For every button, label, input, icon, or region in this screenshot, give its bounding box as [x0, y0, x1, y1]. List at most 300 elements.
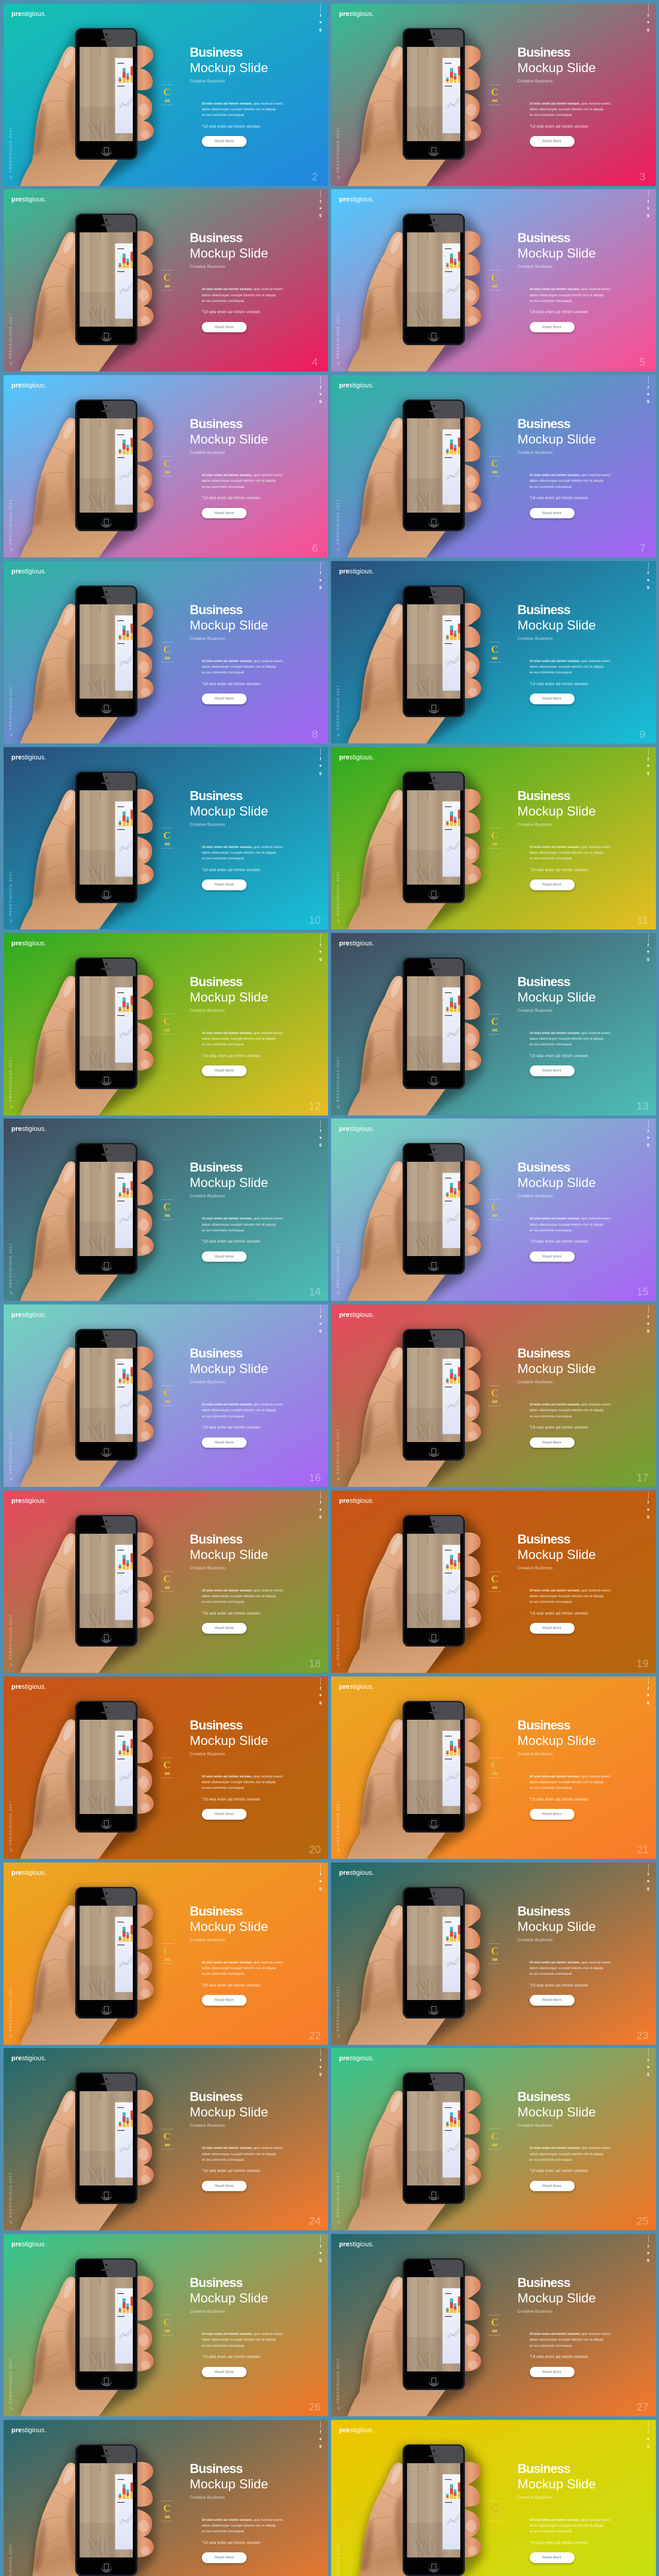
- body text: tation ullamcorper suscipit lobortis nisl ut aliquip: [529, 1595, 603, 1598]
- body text: [202, 1216, 283, 1233]
- body text: Ut wisi enim ad minim veniam, quis nostrud exerci: [202, 1961, 283, 1964]
- page number: 10: [309, 914, 321, 926]
- body text: Ut wisi enim ad minim veniam, quis nostrud exerci: [529, 659, 611, 663]
- button: [529, 1251, 575, 1262]
- body text: Ut wisi enim ad minim veniam, quis nostrud exerci: [202, 1775, 283, 1778]
- logo: prestigious.: [11, 9, 46, 18]
- social icons: ♥: [319, 1136, 322, 1140]
- button: Read More: [215, 1625, 234, 1630]
- body text: ex ea commodo consequat.: [202, 299, 245, 303]
- subtitle: Creative Business: [189, 1193, 225, 1198]
- page number: 11: [637, 914, 648, 926]
- title: [517, 1160, 596, 1191]
- social icons: ♥: [647, 2251, 649, 2256]
- social icons: g: [647, 27, 649, 32]
- subtitle: Creative Business: [189, 1379, 225, 1384]
- body text: tation ullamcorper suscipit lobortis nisl ut aliquip: [202, 294, 276, 297]
- social icons: f: [648, 199, 649, 204]
- title: [517, 230, 596, 261]
- button: Read More: [215, 139, 234, 143]
- button: [529, 879, 575, 890]
- title: Mockup Slide: [189, 1548, 268, 1562]
- button: [202, 2552, 247, 2563]
- panel: slide 18: [3, 1490, 328, 1673]
- social icons: f: [648, 13, 649, 18]
- page number: 13: [636, 1100, 649, 1112]
- social icons: f: [320, 943, 321, 947]
- watermark: [489, 1199, 501, 1220]
- hand holding phone: [345, 24, 488, 186]
- watermark: C: [163, 1387, 171, 1399]
- title: [517, 1718, 596, 1749]
- social icons: g: [647, 771, 649, 775]
- quote: "Ut wisi enim ad minim veniam: [529, 1239, 588, 1244]
- body text: ex ea commodo consequat.: [529, 1229, 573, 1232]
- watermark: C: [491, 87, 498, 98]
- social icons: ♥: [647, 950, 649, 954]
- watermark: C: [163, 644, 171, 655]
- title: Business: [189, 417, 242, 431]
- quote: "Ut wisi enim ad minim veniam: [529, 2540, 588, 2545]
- logo: prestigious.: [339, 939, 374, 947]
- title: [189, 1718, 268, 1749]
- logo: prestigious.: [339, 1497, 374, 1504]
- title: [189, 230, 268, 261]
- body text: [529, 1216, 611, 1233]
- page number: 15: [636, 1286, 649, 1298]
- title: Mockup Slide: [189, 618, 268, 633]
- panel: slide 6: [3, 375, 328, 557]
- body text: Ut wisi enim ad minim veniam, quis nostrud exerci: [529, 1775, 611, 1778]
- body text: [529, 1774, 611, 1791]
- social icons: [646, 562, 651, 590]
- hand holding phone: [331, 1118, 656, 1301]
- title: [517, 1346, 596, 1377]
- hand holding phone: [3, 2048, 328, 2230]
- social icons: [318, 190, 323, 219]
- watermark: C: [491, 1759, 498, 1771]
- watermark: [489, 1757, 501, 1778]
- vertical credit: © PRESTIGIOUS 2017: [337, 1243, 340, 1294]
- panel: slide 24: [3, 2048, 328, 2230]
- body text: tation ullamcorper suscipit lobortis nisl ut aliquip: [529, 1967, 603, 1970]
- social icons: ♥: [647, 1879, 649, 1884]
- body text: Ut wisi enim ad minim veniam, quis nostrud exerci: [529, 1961, 611, 1964]
- button: Read More: [215, 1440, 234, 1445]
- hand holding phone: [3, 1676, 328, 1859]
- social icons: ♥: [319, 764, 322, 768]
- page number: 20: [309, 1844, 321, 1856]
- watermark: [489, 456, 501, 477]
- watermark: C: [491, 1387, 498, 1399]
- title: [189, 2275, 268, 2306]
- title: [189, 1346, 268, 1377]
- button: [202, 879, 247, 890]
- quote: "Ut wisi enim ad minim veniam: [529, 1982, 588, 1988]
- social icons: g: [319, 957, 322, 961]
- hand holding phone: [3, 1490, 328, 1673]
- title: Mockup Slide: [189, 1734, 268, 1748]
- title: Mockup Slide: [189, 2477, 268, 2492]
- body text: Ut wisi enim ad minim veniam, quis nostrud exerci: [202, 845, 283, 849]
- panel: slide 19: [331, 1490, 656, 1673]
- subtitle: Creative Business: [189, 2309, 225, 2314]
- button: [202, 322, 247, 332]
- title: Business: [517, 417, 570, 431]
- social icons: ♥: [319, 2065, 322, 2070]
- body text: [529, 2517, 611, 2535]
- title: Mockup Slide: [517, 1734, 596, 1748]
- button: [202, 1251, 247, 1262]
- title: [517, 416, 596, 447]
- vertical credit: © PRESTIGIOUS 2017: [337, 313, 340, 364]
- button: Read More: [215, 2369, 234, 2374]
- title: [189, 1532, 268, 1563]
- social icons: [646, 2049, 651, 2078]
- title: [189, 1903, 268, 1934]
- social icons: ♥: [647, 764, 649, 768]
- subtitle: Creative Business: [517, 2309, 553, 2314]
- button: [202, 508, 247, 518]
- vertical credit: © PRESTIGIOUS 2017: [9, 1429, 12, 1480]
- social icons: g: [319, 1700, 322, 1705]
- body text: ex ea commodo consequat.: [202, 1415, 245, 1418]
- title: Business: [517, 231, 570, 245]
- title: [189, 45, 268, 75]
- body text: ex ea commodo consequat.: [202, 485, 245, 488]
- body text: Ut wisi enim ad minim veniam, quis nostrud exerci: [529, 287, 611, 291]
- subtitle: Creative Business: [189, 450, 225, 455]
- body text: [529, 844, 611, 861]
- title: Mockup Slide: [517, 432, 596, 447]
- watermark: [161, 270, 173, 291]
- social icons: f: [320, 2430, 321, 2434]
- panel: slide 15: [331, 1118, 656, 1301]
- social icons: g: [647, 1514, 649, 1519]
- logo: prestigious.: [11, 1868, 46, 1876]
- social icons: f: [648, 571, 649, 575]
- social icons: ♥: [647, 20, 649, 25]
- logo: prestigious.: [11, 195, 46, 203]
- quote: "Ut wisi enim ad minim veniam: [202, 124, 261, 129]
- body text: ex ea commodo consequat.: [202, 1043, 245, 1046]
- hand holding phone: [331, 375, 656, 557]
- title: Mockup Slide: [189, 1176, 268, 1190]
- social icons: [318, 1677, 323, 1706]
- title: Business: [189, 45, 242, 60]
- page number: 2: [312, 171, 318, 182]
- watermark: C: [163, 2317, 171, 2328]
- social icons: g: [647, 213, 649, 217]
- watermark: C: [163, 87, 171, 98]
- social icons: ♥: [319, 2251, 322, 2256]
- body text: [202, 2517, 283, 2535]
- watermark: [489, 84, 501, 105]
- hand holding phone: [331, 933, 656, 1115]
- button: [202, 693, 247, 704]
- body text: [202, 1030, 283, 1047]
- social icons: g: [319, 771, 322, 775]
- body text: ex ea commodo consequat.: [529, 1786, 573, 1790]
- body text: [529, 1588, 611, 1605]
- title: [189, 2089, 268, 2120]
- watermark: [161, 1943, 173, 1964]
- body text: ex ea commodo consequat.: [202, 857, 245, 860]
- watermark: [489, 2315, 501, 2335]
- vertical credit: © PRESTIGIOUS 2017: [337, 2358, 340, 2409]
- subtitle: Creative Business: [189, 2123, 225, 2128]
- social icons: g: [319, 1886, 322, 1891]
- title: [517, 2275, 596, 2306]
- title: Business: [517, 1346, 570, 1361]
- body text: tation ullamcorper suscipit lobortis nisl ut aliquip: [202, 1037, 276, 1041]
- watermark: [161, 456, 173, 477]
- quote: "Ut wisi enim ad minim veniam: [202, 1239, 261, 1244]
- social icons: g: [319, 1328, 322, 1333]
- panel: slide 21: [331, 1676, 656, 1859]
- button: Read More: [542, 325, 562, 329]
- vertical credit: © PRESTIGIOUS 2017: [9, 1243, 12, 1294]
- vertical credit: © PRESTIGIOUS 2017: [337, 499, 340, 550]
- hand holding phone: [3, 747, 328, 929]
- social icons: g: [319, 2258, 322, 2262]
- page number: 7: [639, 543, 646, 554]
- social icons: g: [647, 1142, 649, 1147]
- button: Read More: [215, 1254, 234, 1259]
- subtitle: Creative Business: [517, 1937, 553, 1942]
- page number: 25: [636, 2215, 649, 2227]
- vertical credit: © PRESTIGIOUS 2017: [337, 685, 340, 736]
- button: Read More: [215, 882, 234, 887]
- button: [202, 1623, 247, 1634]
- social icons: [646, 1863, 651, 1892]
- panel: slide 10: [3, 747, 328, 929]
- page number: 22: [309, 2030, 321, 2041]
- title: Business: [517, 1904, 570, 1919]
- button: Read More: [215, 1811, 234, 1816]
- social icons: [318, 4, 323, 33]
- watermark: C: [491, 644, 498, 655]
- logo: prestigious.: [11, 939, 46, 947]
- social icons: ♥: [319, 1321, 322, 1326]
- panel: slide 4: [3, 189, 328, 371]
- title: Mockup Slide: [517, 1362, 596, 1376]
- panel: slide 20: [3, 1676, 328, 1859]
- social icons: [646, 934, 651, 962]
- hand holding phone: [3, 375, 328, 557]
- hand holding phone: [331, 1862, 656, 2044]
- title: Mockup Slide: [189, 61, 268, 75]
- hand holding phone: [331, 1490, 656, 1673]
- body text: [529, 286, 611, 304]
- social icons: ♥: [647, 1321, 649, 1326]
- social icons: f: [320, 757, 321, 761]
- logo: prestigious.: [11, 567, 46, 575]
- body text: [202, 2331, 283, 2349]
- social icons: [318, 1492, 323, 1520]
- body text: Ut wisi enim ad minim veniam, quis nostrud exerci: [529, 1589, 611, 1592]
- title: Business: [189, 603, 242, 617]
- quote: "Ut wisi enim ad minim veniam: [202, 309, 261, 314]
- button: [529, 322, 575, 332]
- body text: [529, 2331, 611, 2349]
- subtitle: Creative Business: [517, 2123, 553, 2128]
- subtitle: Creative Business: [517, 264, 553, 269]
- vertical credit: © PRESTIGIOUS 2017: [9, 499, 12, 550]
- social icons: ♥: [647, 1136, 649, 1140]
- body text: tation ullamcorper suscipit lobortis nisl ut aliquip: [529, 665, 603, 669]
- title: Mockup Slide: [517, 61, 596, 75]
- subtitle: Creative Business: [517, 1008, 553, 1013]
- logo: prestigious.: [11, 2426, 46, 2434]
- vertical credit: © PRESTIGIOUS 2017: [9, 2172, 12, 2223]
- watermark: [489, 1385, 501, 1406]
- body text: ex ea commodo consequat.: [529, 2530, 573, 2533]
- vertical credit: © PRESTIGIOUS 2017: [337, 127, 340, 178]
- subtitle: Creative Business: [517, 1565, 553, 1570]
- body text: tation ullamcorper suscipit lobortis nisl ut aliquip: [202, 1223, 276, 1226]
- title: Business: [517, 1532, 570, 1547]
- watermark: C: [491, 1945, 498, 1957]
- body text: tation ullamcorper suscipit lobortis nisl ut aliquip: [202, 2524, 276, 2528]
- body text: tation ullamcorper suscipit lobortis nisl ut aliquip: [202, 1409, 276, 1412]
- watermark: C: [163, 830, 171, 841]
- body text: tation ullamcorper suscipit lobortis nisl ut aliquip: [529, 1223, 603, 1226]
- body text: [202, 2145, 283, 2163]
- panel: slide 9: [331, 561, 656, 743]
- social icons: ♥: [319, 1693, 322, 1698]
- page number: 12: [309, 1100, 321, 1112]
- social icons: [646, 1492, 651, 1520]
- button: [529, 2367, 575, 2377]
- social icons: f: [648, 2058, 649, 2063]
- button: [529, 1995, 575, 2005]
- button: Read More: [215, 2183, 234, 2188]
- body text: tation ullamcorper suscipit lobortis nisl ut aliquip: [529, 108, 603, 111]
- hand holding phone: [331, 561, 656, 743]
- subtitle: Creative Business: [517, 1379, 553, 1384]
- watermark: C: [163, 1945, 171, 1957]
- body text: [202, 1960, 283, 1977]
- logo: prestigious.: [11, 2054, 46, 2062]
- button: Read More: [215, 2555, 234, 2560]
- hand holding phone: [3, 1304, 328, 1487]
- title: [189, 602, 268, 633]
- social icons: [318, 748, 323, 776]
- quote: "Ut wisi enim ad minim veniam: [529, 1053, 588, 1058]
- button: Read More: [215, 1068, 234, 1073]
- body text: Ut wisi enim ad minim veniam, quis nostrud exerci: [202, 473, 283, 477]
- panel: slide 11: [331, 747, 656, 929]
- button: Read More: [215, 511, 234, 515]
- title: [189, 2461, 268, 2492]
- watermark: C: [491, 458, 498, 469]
- watermark: C: [491, 1573, 498, 1585]
- body text: tation ullamcorper suscipit lobortis nisl ut aliquip: [202, 851, 276, 855]
- page number: 6: [312, 543, 318, 554]
- button: [202, 1437, 247, 1448]
- body text: tation ullamcorper suscipit lobortis nisl ut aliquip: [202, 1595, 276, 1598]
- title: Business: [517, 45, 570, 60]
- panel: slide 28: [3, 2420, 328, 2576]
- quote: "Ut wisi enim ad minim veniam: [529, 681, 588, 686]
- page number: 18: [309, 1658, 321, 1670]
- logo: prestigious.: [339, 195, 374, 203]
- subtitle: Creative Business: [517, 78, 553, 83]
- hand holding phone: [3, 2420, 328, 2576]
- watermark: C: [491, 272, 498, 283]
- body text: Ut wisi enim ad minim veniam, quis nostrud exerci: [202, 287, 283, 291]
- watermark: [489, 2501, 501, 2521]
- vertical credit: © PRESTIGIOUS 2017: [337, 1986, 340, 2037]
- panel: slide 27: [331, 2234, 656, 2416]
- body text: [529, 1030, 611, 1047]
- vertical credit: © PRESTIGIOUS 2017: [9, 1057, 12, 1108]
- social icons: ♥: [319, 206, 322, 211]
- social icons: f: [320, 2058, 321, 2063]
- body text: [202, 844, 283, 861]
- button: Read More: [542, 139, 562, 143]
- social icons: f: [320, 1315, 321, 1319]
- page number: 21: [636, 1844, 649, 1856]
- social icons: ♥: [319, 578, 322, 583]
- social icons: [646, 376, 651, 404]
- title: Mockup Slide: [517, 2105, 596, 2120]
- button: [529, 1623, 575, 1634]
- social icons: g: [647, 2444, 649, 2448]
- subtitle: Creative Business: [189, 264, 225, 269]
- watermark: C: [491, 2317, 498, 2328]
- title: [517, 1903, 596, 1934]
- social icons: f: [648, 2244, 649, 2249]
- watermark: [161, 2315, 173, 2335]
- social icons: ♥: [319, 1879, 322, 1884]
- title: Mockup Slide: [189, 804, 268, 819]
- body text: tation ullamcorper suscipit lobortis nisl ut aliquip: [529, 1409, 603, 1412]
- body text: tation ullamcorper suscipit lobortis nisl ut aliquip: [202, 2153, 276, 2156]
- title: Mockup Slide: [517, 2291, 596, 2306]
- vertical credit: © PRESTIGIOUS 2017: [337, 1614, 340, 1666]
- watermark: [161, 1199, 173, 1220]
- body text: ex ea commodo consequat.: [529, 1600, 573, 1604]
- panel: slide 14: [3, 1118, 328, 1301]
- subtitle: Creative Business: [517, 1751, 553, 1756]
- button: Read More: [542, 511, 562, 515]
- body text: ex ea commodo consequat.: [529, 485, 573, 488]
- page number: 8: [312, 728, 318, 740]
- social icons: [646, 2421, 651, 2449]
- title: Business: [517, 2276, 570, 2290]
- body text: [529, 658, 611, 676]
- social icons: g: [319, 585, 322, 589]
- body text: tation ullamcorper suscipit lobortis nisl ut aliquip: [202, 1967, 276, 1970]
- watermark: [161, 1571, 173, 1592]
- hand holding phone: [331, 189, 656, 371]
- body text: ex ea commodo consequat.: [202, 2530, 245, 2533]
- quote: "Ut wisi enim ad minim veniam: [202, 2168, 261, 2173]
- page number: 9: [639, 728, 646, 740]
- button: [529, 2181, 575, 2191]
- button: Read More: [542, 2555, 562, 2560]
- watermark: C: [163, 1201, 171, 1213]
- logo: prestigious.: [339, 1125, 374, 1132]
- button: [202, 1065, 247, 1076]
- social icons: f: [320, 1686, 321, 1691]
- title: Business: [517, 2462, 570, 2476]
- watermark: [161, 642, 173, 663]
- subtitle: Creative Business: [517, 450, 553, 455]
- body text: Ut wisi enim ad minim veniam, quis nostrud exerci: [529, 102, 611, 105]
